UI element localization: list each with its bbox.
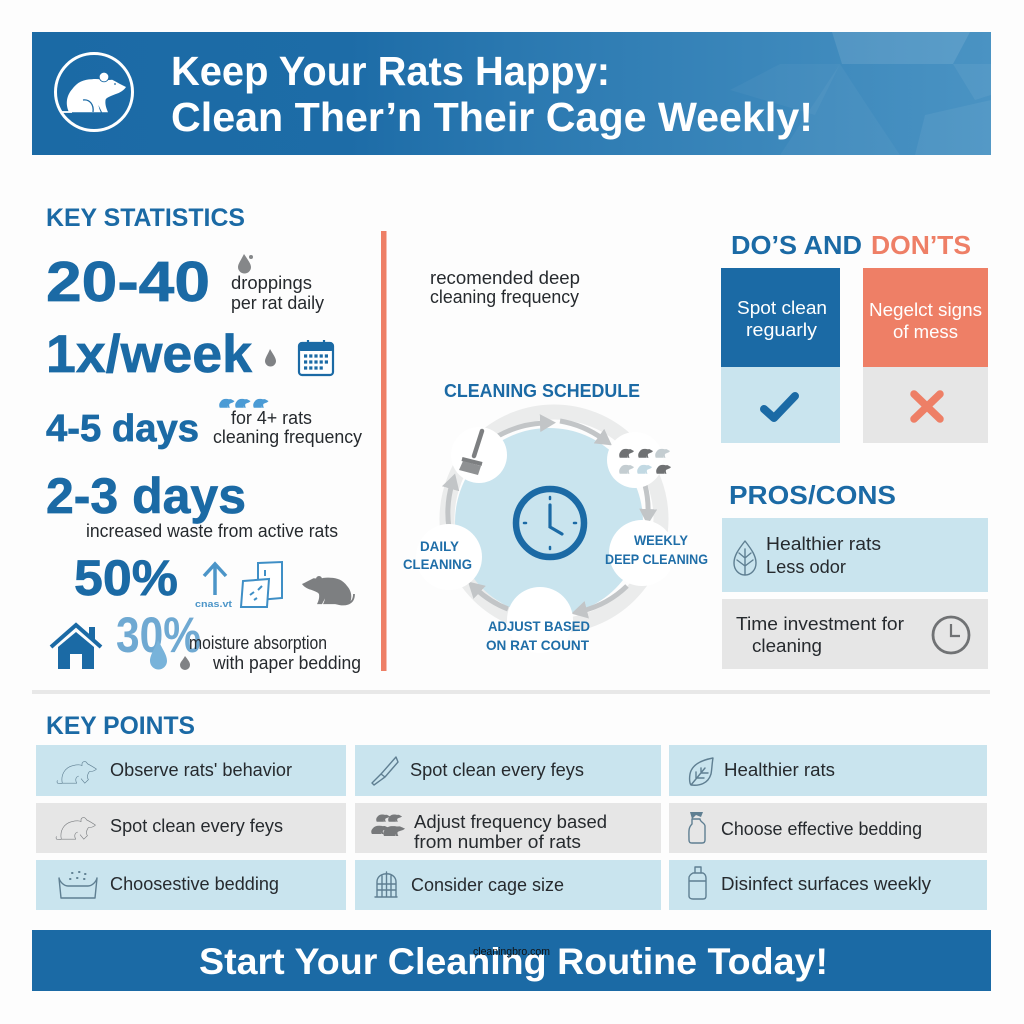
heading: cleaning schedule: CLEANING SCHEDULE: [444, 380, 640, 401]
stat: 30% moisture: moisture absorption: [189, 633, 327, 653]
text: recommended deep cleaning: [430, 268, 580, 307]
card: cons: Time investment for: [736, 614, 904, 634]
stat: 20-40 droppings: 20-40: [46, 250, 210, 314]
card: pros: [722, 518, 988, 592]
icon: up arrow: cnas.vt: [195, 599, 232, 609]
card: don't: of mess: [893, 322, 958, 342]
item: adjust frequency: Adjust frequency based: [414, 812, 607, 832]
heading: do's and don'ts: DO’S AND: [731, 230, 862, 260]
heading: pros/cons: PROS/CONS: [729, 480, 896, 510]
card: cons: cleaning: [752, 636, 822, 656]
item: disinfect surfaces weekly: Disinfect surfaces weekly: [721, 874, 931, 894]
item: spot clean every feys, row two: [36, 803, 346, 853]
title: [171, 48, 813, 140]
icon: water drops: [150, 640, 190, 670]
item: consider cage size: [355, 860, 661, 910]
item: adjust frequency: from number of rats: [414, 832, 581, 852]
node: adjust based on rat count: [486, 587, 590, 653]
header banner: [32, 32, 991, 155]
stat: 2-3 days: [46, 468, 338, 541]
item: observe rats' behavior: [36, 745, 346, 796]
item: choose effective bedding: Choose effective bedding: [721, 819, 922, 839]
stat: 2-3 days: 2-3 days: [46, 468, 246, 524]
card: do: [721, 268, 840, 443]
icon: bedding sheets: [241, 562, 282, 607]
icon: calendar: [299, 340, 333, 375]
stat: 30% moisture: 30%: [116, 607, 201, 663]
heading: do's and don'ts: DON’TS: [871, 230, 971, 260]
coral divider bar: [381, 231, 386, 671]
icon: up arrow: [195, 564, 232, 609]
horizontal divider: [32, 690, 990, 694]
heading: key statistics: KEY STATISTICS: [46, 204, 245, 232]
stat: 20-40 droppings: [46, 250, 324, 314]
stat: 30% moisture: with paper bedding: [212, 653, 361, 673]
icon: three blue rats: [219, 399, 268, 408]
node: adjust based on rat count: ADJUST BASED: [488, 618, 590, 634]
title: Clean Ther’n Their Cage Weekly!: [171, 94, 813, 140]
item: spot clean every feys: [355, 745, 661, 796]
node: adjust based on rat count: ON RAT COUNT: [486, 637, 589, 653]
cycle ring: [447, 412, 661, 626]
call to action banner: Start Your Cleaning Routine Today!: [199, 941, 828, 982]
icon: house: [51, 625, 101, 669]
item: choose bedding: Choosestive bedding: [110, 874, 279, 894]
panel: key points: [36, 712, 987, 910]
stat: 4-5 days: [46, 399, 362, 450]
stat: 2-3 days: increased waste from active rats: [86, 521, 338, 541]
item: disinfect surfaces weekly: [669, 860, 987, 910]
card: don't: [863, 268, 988, 443]
item: spot clean every feys, row two: Spot clean every feys: [110, 816, 283, 836]
watermark text: cleaningbro.com: [473, 946, 550, 958]
node: daily cleaning: [403, 524, 482, 590]
card: don't: Negelct signs: [869, 300, 982, 320]
icon: rats node: [607, 432, 671, 488]
icon: clock: [516, 489, 584, 557]
card: pros: Less odor: [766, 557, 846, 577]
icon: check mark: [764, 396, 795, 418]
stat: 4-5 days: 4-5 days: [46, 408, 199, 450]
icon: leaf: [734, 541, 756, 575]
heading: key points: KEY POINTS: [46, 712, 195, 740]
stat: 1x/week: 1x/week: [46, 325, 253, 384]
stat: 4-5 days: for 4+ rats: [231, 408, 312, 428]
item: observe rats' behavior: Observe rats' behavior: [110, 760, 292, 780]
item: spot clean every feys: Spot clean every feys: [410, 760, 584, 780]
item: choose bedding: [36, 860, 346, 910]
node: weekly deep cleaning: DEEP CLEANING: [605, 551, 708, 567]
item: choose effective bedding: [669, 803, 987, 853]
stat: 20-40 droppings: droppings: [231, 273, 312, 293]
icon: brush node: [451, 427, 507, 483]
heading: do's and don'ts: [731, 230, 971, 260]
text: recommended deep cleaning: recomended deep: [430, 268, 580, 288]
panel: pros and cons: [722, 480, 988, 669]
node: daily cleaning: DAILY: [420, 538, 460, 554]
item: healthier rats: Healthier rats: [724, 760, 835, 780]
item: adjust frequency: [355, 803, 661, 853]
call to action banner: [32, 930, 991, 991]
stat: 50%: [74, 550, 354, 609]
icon: grey clock: [933, 617, 969, 653]
stat: 4-5 days: cleaning frequency: [213, 427, 362, 447]
card: do: reguarly: [746, 320, 817, 340]
text: recommended deep cleaning: cleaning frequency: [430, 287, 579, 307]
stat: 20-40 droppings: per rat daily: [231, 293, 324, 313]
panel: key statistics: [46, 204, 362, 673]
title: Keep Your Rats Happy:: [171, 48, 610, 94]
card: cons: [722, 599, 988, 669]
panel: cleaning schedule: [403, 380, 708, 653]
stat: 50%: 50%: [74, 550, 178, 606]
node: daily cleaning: CLEANING: [403, 556, 472, 572]
panel: do's and don'ts: [721, 230, 988, 443]
item: consider cage size: Consider cage size: [411, 875, 564, 895]
card: pros: Healthier rats: [766, 534, 881, 554]
node: weekly deep cleaning: [605, 520, 708, 586]
icon: grey rat: [302, 576, 354, 604]
node: weekly deep cleaning: WEEKLY: [634, 532, 689, 548]
item: healthier rats: [669, 745, 987, 796]
card: do: Spot clean: [737, 298, 827, 318]
stat: 30% moisture: [51, 607, 361, 673]
icon: cross: [914, 394, 940, 419]
icon: rat in circle: [56, 54, 132, 130]
